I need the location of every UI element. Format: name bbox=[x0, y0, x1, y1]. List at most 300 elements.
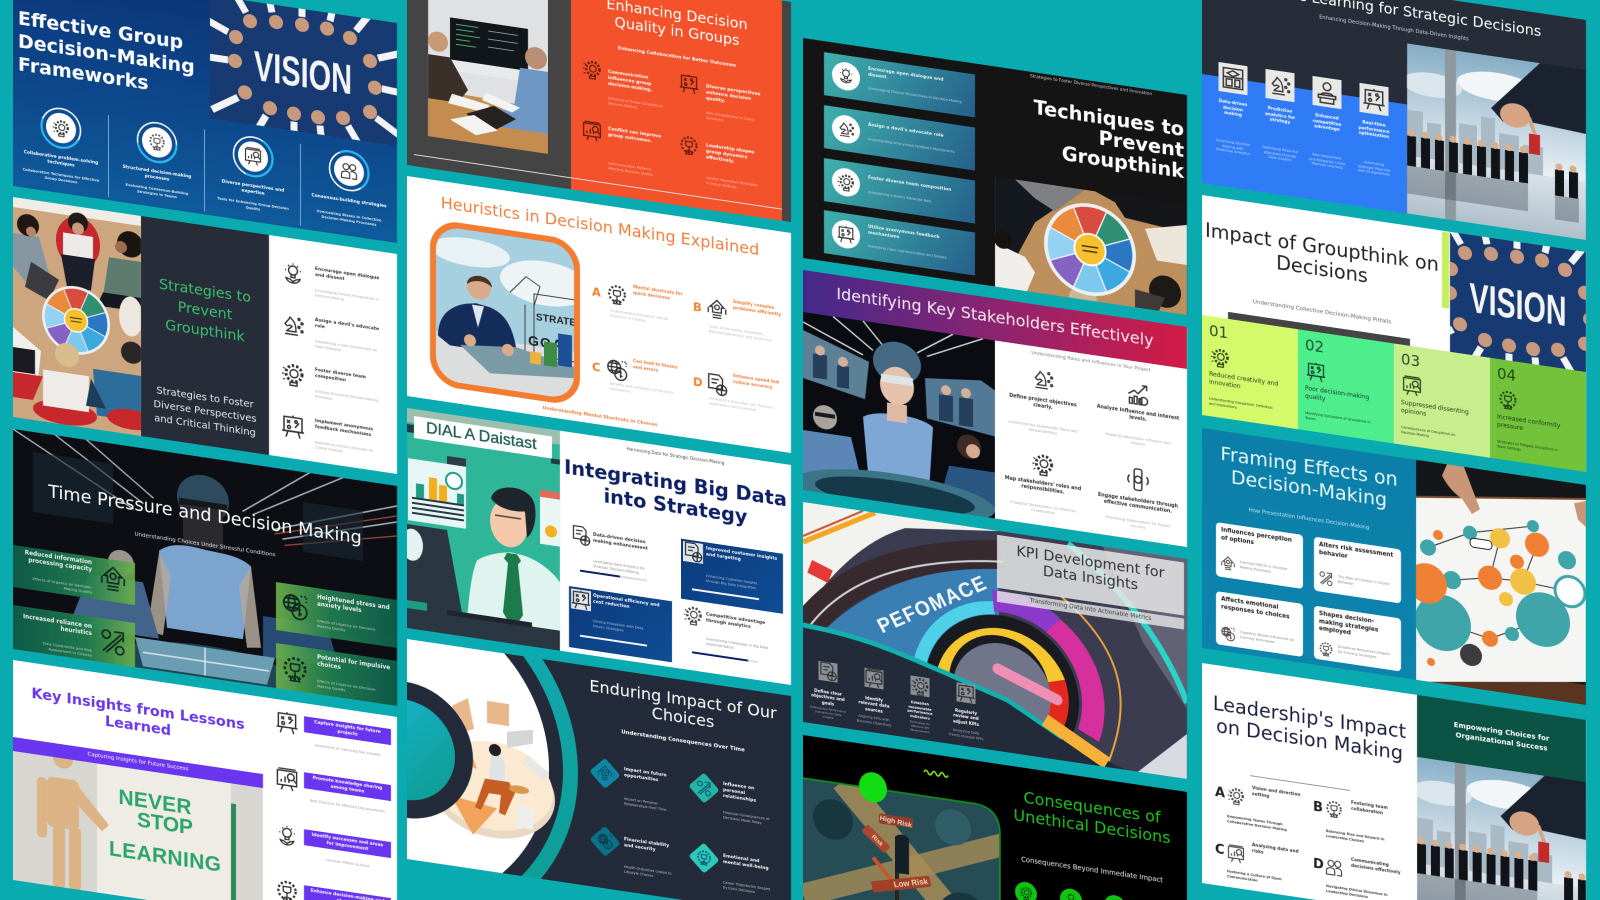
text: communicating decisions: Communicating bbox=[1351, 858, 1389, 868]
text: subtitle: Encouraging Diverse Perspectives in Decision-Making bbox=[868, 86, 962, 104]
text: balancing risk: Leadership Choices bbox=[1326, 833, 1364, 843]
heading: Decision-Making bbox=[1231, 466, 1387, 511]
text: define clear objectives: goals bbox=[822, 699, 834, 706]
photo: vision hands: VISION bbox=[254, 42, 352, 103]
icon: gear bbox=[832, 166, 860, 198]
letter D: D bbox=[1313, 856, 1324, 873]
icon: bulb bbox=[276, 823, 298, 850]
text: heading: employed bbox=[1319, 626, 1351, 637]
text: subtitle: Effects of Urgency on Decision- bbox=[33, 576, 92, 590]
text: financial consequences bbox=[723, 810, 783, 829]
text: heading: Reduced information bbox=[25, 550, 92, 566]
text: mental shortcuts: quick decisions bbox=[633, 291, 670, 301]
text: heading: behavior bbox=[1319, 549, 1348, 560]
text: heading bbox=[1209, 371, 1293, 398]
text: subtitle: Team Settings bbox=[1497, 444, 1521, 451]
text: consensus-building strategies: Consensus-building strategies bbox=[311, 193, 387, 210]
text: influence on relationships: Influence on bbox=[723, 782, 754, 792]
panel: heuristics in decision making explained bbox=[407, 176, 791, 453]
text: heading: Influences perception bbox=[1221, 527, 1292, 544]
title box bbox=[997, 535, 1184, 616]
heading: Data Insights bbox=[1043, 564, 1138, 594]
text: define clear objectives bbox=[806, 686, 850, 709]
card: increased reliance on heuristics bbox=[13, 605, 135, 667]
text: structured decision-making processes: processes bbox=[145, 174, 169, 182]
icon: arrow bbox=[101, 629, 125, 656]
text: career trajectories bbox=[723, 880, 783, 899]
text: impact on relationships: Relationships Over Time bbox=[624, 801, 667, 812]
text: communicating decisions bbox=[1351, 858, 1407, 877]
number: 04 bbox=[1497, 364, 1516, 385]
photo: businessman with goal sketch: GOAL bbox=[528, 332, 572, 355]
panel: identifying key stakeholders effectively bbox=[803, 270, 1187, 547]
text: subtitle: Assessment in Choices bbox=[48, 646, 92, 658]
panel: machine learning for strategic decisions bbox=[1202, 0, 1586, 240]
heading: Enduring Impact of Our bbox=[589, 676, 777, 723]
icon: study square bbox=[1218, 62, 1248, 95]
photo: businessman with goal sketch: STRATE bbox=[536, 312, 576, 329]
text: emotional wellbeing: mental well-being bbox=[723, 860, 769, 872]
text: heading: Heightened stress and bbox=[317, 595, 390, 611]
text: heading bbox=[1305, 385, 1389, 412]
text: benefits and limitations: Benefits and Limitations of Heuristic bbox=[610, 381, 674, 395]
card: shapes strategies bbox=[1314, 606, 1401, 672]
text: empowering teams: Collaborative Decision Making bbox=[1227, 819, 1287, 832]
text: encouraging diverse perspectives: Encouraging Diverse Perspectives in bbox=[315, 288, 379, 302]
text: fostering open communication: Fostering a Culture of Open bbox=[1227, 869, 1282, 881]
text: types of heuristics bbox=[709, 324, 779, 344]
subtitle: Strategies to Foster bbox=[156, 385, 254, 411]
label: identify successes: for improvement bbox=[327, 841, 368, 852]
photo: never stop learning mannequin bbox=[13, 751, 263, 900]
heading: Choices bbox=[652, 703, 714, 732]
text: optimizing resource bbox=[1255, 144, 1305, 165]
text: heuristics in everyday life: Heuristics in Everyday Life: Practical bbox=[709, 396, 773, 410]
progress bar bbox=[692, 588, 759, 600]
text: leadership shapes: Leadership shapes bbox=[706, 143, 755, 155]
text: conflict can improve: Conflict can improve bbox=[608, 126, 661, 139]
illustration: analyst at laptop bbox=[407, 408, 560, 650]
heading: Quality in Groups bbox=[614, 14, 740, 49]
text: analyzing data bbox=[1252, 843, 1308, 862]
text: balancing risk: Balancing Risk and Reward in bbox=[1326, 829, 1384, 841]
text: overcoming challenges: Implementation bbox=[706, 641, 734, 649]
text: data-driven decision making: making enhancement bbox=[593, 538, 648, 551]
text: enhance speed: Enhance speed but bbox=[733, 374, 779, 386]
text: heading: choices bbox=[317, 662, 341, 672]
text: subtitle bbox=[706, 573, 772, 592]
label: promote knowledge sharing bbox=[304, 772, 391, 801]
text: subtitle: Making Quality bbox=[317, 683, 345, 692]
text: analyze influence: Analyze influence and interest bbox=[1097, 404, 1179, 422]
icon: brain gear bbox=[582, 57, 602, 80]
panel: leadership's impact on decision making bbox=[1202, 663, 1586, 900]
text: collaborative techniques subtitle: Collaborative Techniques for Effective bbox=[23, 168, 99, 183]
text: fostering team: Fostering team bbox=[1351, 801, 1388, 811]
text: identify relevant data: sources bbox=[865, 706, 883, 714]
text: tools subtitle: Quality bbox=[246, 206, 260, 212]
text: real-time performance: performance bbox=[1359, 125, 1389, 135]
side panel dark bbox=[141, 216, 269, 455]
icon: square two bbox=[864, 668, 884, 689]
icon: board bbox=[832, 218, 860, 250]
icon: square one bbox=[818, 661, 838, 683]
subtitle: Transforming Data into Actionable Metrics bbox=[1030, 598, 1151, 622]
text: enhanced competitive: advantage bbox=[1314, 124, 1340, 133]
text: establishing safe environment: Open Dialogue bbox=[315, 344, 341, 352]
icon: square bbox=[571, 588, 591, 611]
label: capture insights: projects bbox=[337, 729, 358, 737]
text: banner title: DIAL A Daistast bbox=[426, 419, 537, 453]
heading bbox=[1202, 691, 1417, 767]
text: heading: Affects emotional bbox=[1221, 596, 1279, 611]
subtitle: Strategies to Foster Diverse Perspectives and Innovation bbox=[1030, 74, 1152, 97]
text: enhancing decision: Making with bbox=[1222, 144, 1244, 151]
text: subtitle bbox=[1401, 425, 1485, 447]
icon bbox=[1220, 555, 1236, 572]
label: identify successes: Identify successes and areas bbox=[312, 833, 383, 848]
photo: two men at computer bbox=[428, 0, 548, 153]
text: subtitle bbox=[1209, 396, 1293, 418]
text: conflict can improve: group outcomes. bbox=[608, 132, 652, 144]
panel: enhancing decision quality in groups bbox=[407, 0, 791, 221]
icon: trophy gear bbox=[284, 656, 307, 683]
panel: key insights from lessons learned bbox=[13, 660, 397, 900]
text: heading bbox=[1497, 413, 1581, 441]
text: heading: Alters risk assessment bbox=[1319, 542, 1393, 559]
text: financial stability: and security bbox=[624, 843, 655, 853]
icon: board bbox=[679, 72, 699, 95]
text: prioritizing stakeholders bbox=[1093, 513, 1183, 536]
text: subtitle: Establishing a Devil's Advocate Role bbox=[868, 190, 931, 204]
card: foster diverse team bbox=[824, 158, 975, 224]
text: heading: of options bbox=[1221, 535, 1254, 546]
icon: green circle one bbox=[1015, 880, 1037, 900]
text: fostering open communication: Communication bbox=[1227, 874, 1258, 882]
text: subtitle: Effects of Urgency on Decision- bbox=[317, 618, 376, 632]
text: subtitle: The Role of Context in Choice Behavior bbox=[1338, 574, 1390, 586]
text: subtitle: Strategies to Mitigate Groupthink in bbox=[1497, 439, 1558, 452]
card: heightened stress and anxiety bbox=[276, 582, 397, 648]
text: mapping stakeholder influence bbox=[1093, 430, 1183, 453]
text: heuristics in everyday life: Applications and Examples bbox=[709, 401, 756, 412]
subtitle: Understanding Collective Decision-Making Pitfalls bbox=[1253, 299, 1391, 326]
text: understanding stakeholder roles: Responsibilities bbox=[1029, 427, 1057, 436]
heading: KPI Development for bbox=[1016, 544, 1165, 582]
text: identify relevant data bbox=[852, 693, 896, 716]
text: biases and errors bbox=[633, 359, 683, 378]
text: appointing devil's advocate: Appointing a Devil's Advocate for bbox=[315, 440, 373, 453]
text: role of leadership: Dynamics bbox=[706, 115, 723, 121]
icon: board bbox=[282, 415, 304, 439]
text: heading: Suppressed dissenting bbox=[1401, 399, 1469, 416]
label: capture insights bbox=[304, 716, 391, 745]
text: influence on relationships bbox=[723, 782, 767, 806]
text: real-time performance bbox=[1349, 118, 1399, 143]
photo: never stop learning mannequin: STOP bbox=[137, 808, 193, 840]
icon: trophy gear bbox=[606, 283, 628, 307]
footer text: Understanding Mental Shortcuts in Choices bbox=[543, 406, 657, 428]
card: potential for impulsive choices bbox=[276, 643, 397, 706]
text: data-driven decision making bbox=[1208, 98, 1258, 122]
text: encourage open dialogue: Encourage open dialogue bbox=[315, 267, 379, 282]
text: simplify complex bbox=[733, 300, 787, 319]
text: vision and direction bbox=[1252, 786, 1308, 805]
text: subtitle bbox=[1305, 411, 1389, 432]
text: navigating ethical dilemmas: Leadership Decisions bbox=[1326, 888, 1368, 899]
text: heading: Increased reliance on bbox=[23, 614, 92, 630]
text: enhancing decision: Enhancing Decision bbox=[1216, 138, 1250, 147]
icon: knight bbox=[1032, 366, 1054, 393]
illustration: concentric circles with isometric scene bbox=[407, 639, 597, 887]
text: heading: Increased conformity bbox=[1497, 413, 1560, 430]
photo: circle meeting with wheel bbox=[13, 197, 142, 436]
icon: watch bbox=[1126, 467, 1150, 493]
photo: hands drawing mind map bbox=[1416, 460, 1586, 705]
text: communication influences: Communication bbox=[608, 69, 648, 80]
text: mapping stakeholder influence: Interest bbox=[1131, 441, 1145, 447]
text: establishing safe environment: Establishing a Safe Environment for bbox=[315, 339, 378, 352]
card: 01 reduced creativity bbox=[1202, 315, 1298, 429]
text: diverse perspectives: quality. bbox=[706, 96, 725, 104]
subtitle: and Critical Thinking bbox=[154, 413, 256, 439]
text: benefits and limitations bbox=[610, 381, 678, 401]
text: enhancing decision: Predictive Analytics bbox=[1216, 147, 1250, 157]
text: communication patterns: Communication Patterns bbox=[608, 161, 651, 171]
text: fostering open communication bbox=[1227, 869, 1295, 889]
letter D: D bbox=[693, 374, 703, 390]
text: enhanced competitive bbox=[1302, 111, 1352, 136]
text: conflict resolution: in Group Settings bbox=[706, 180, 736, 188]
photo: woman with headset at table bbox=[13, 429, 398, 688]
text: implement anonymous feedback: feedback mechanisms bbox=[315, 425, 371, 438]
progress bar bbox=[580, 569, 647, 581]
photo: crossroads with risk signs: Risk bbox=[870, 834, 884, 848]
text: engaging stakeholders bbox=[998, 498, 1088, 521]
heading bbox=[571, 0, 783, 56]
text: diverse perspectives and expertise: expertise bbox=[241, 188, 265, 196]
text: leveraging analytics: Leveraging Data Analytics for bbox=[593, 558, 645, 570]
photo: wheel meeting from above bbox=[995, 176, 1187, 315]
photo: crossroads with risk signs: High Risk bbox=[880, 815, 912, 830]
panel: strategies to prevent groupthink bbox=[13, 197, 397, 474]
text: analyze influence: levels. bbox=[1129, 415, 1147, 423]
text: importance of capturing: Importance of Capturing Key Insights bbox=[315, 743, 380, 757]
text: risk assessment: Risk Assessment bbox=[1312, 152, 1342, 161]
banner: dial a daistast bbox=[414, 416, 552, 458]
text: enhanced competitive: competitive bbox=[1313, 119, 1341, 128]
text: types of heuristics: Representativeness, and Anchoring bbox=[709, 329, 771, 342]
icon: growth bbox=[1126, 382, 1150, 408]
heading: Integrating Big Data bbox=[564, 455, 787, 511]
text: health outcomes: Health Outcomes Linked to bbox=[624, 864, 672, 876]
text: heading bbox=[1221, 596, 1301, 623]
icon: consensus building bbox=[328, 150, 370, 192]
heading: Impact of Groupthink on bbox=[1205, 218, 1439, 276]
text: influence of cohesion: Decision-Making bbox=[608, 100, 637, 109]
icon: diamond four bbox=[686, 837, 722, 879]
text: impact on relationships: Impact on Personal bbox=[624, 796, 658, 805]
icon bbox=[1498, 389, 1518, 412]
text: impact on future: Impact on future bbox=[624, 767, 667, 779]
icon: gear head bbox=[1227, 786, 1245, 806]
panel: integrating big data into strategy bbox=[407, 408, 791, 684]
text: heading: heuristics bbox=[60, 627, 92, 638]
text: enhance speed bbox=[733, 374, 785, 393]
letter A: A bbox=[1215, 785, 1225, 801]
text: heading: Assign a devil's advocate role bbox=[868, 123, 944, 139]
text: understanding stakeholder roles: Understanding Stakeholder Roles and bbox=[1008, 419, 1078, 434]
letter B: B bbox=[1313, 799, 1323, 816]
text: heading: processing capacity bbox=[28, 558, 92, 574]
text: collaborative problem-solving techniques: Collaborative problem-solving bbox=[24, 150, 98, 166]
text: heading bbox=[24, 550, 92, 574]
text: subtitle: and Implications bbox=[1209, 401, 1237, 409]
text: diverse perspectives: Diverse perspectives bbox=[706, 84, 760, 97]
icon: document bbox=[706, 372, 728, 398]
text: automating strategic planning: Automating bbox=[1364, 160, 1384, 167]
text: heading: Improved customer insights bbox=[706, 546, 777, 562]
heading: Consequences of bbox=[1023, 788, 1161, 827]
icon: globe bbox=[606, 358, 628, 383]
label: identify successes bbox=[304, 829, 391, 858]
text: regularly review bbox=[944, 706, 988, 728]
text: subtitle: Driving Innovation with Data- bbox=[593, 618, 645, 630]
icon: chart bbox=[582, 119, 602, 142]
subtitle: Understanding Choices Under Stressful Conditions bbox=[134, 532, 275, 558]
text: leadership shapes bbox=[706, 143, 762, 169]
photo: chess pieces and hand bbox=[1407, 43, 1586, 240]
heading: Unethical Decisions bbox=[1013, 805, 1171, 848]
text: automating strategic planning: Strategic Planning bbox=[1358, 164, 1390, 173]
heading: Key Insights from Lessons bbox=[31, 686, 245, 733]
text: aligning kpis bbox=[852, 713, 896, 729]
text: biases and errors: Can lead to biases bbox=[633, 359, 677, 371]
text: influence of cohesion bbox=[608, 96, 674, 115]
letter C: C bbox=[592, 359, 600, 375]
text: data-driven decision making: decision bbox=[1223, 105, 1243, 113]
text: heading bbox=[868, 225, 958, 250]
subtitle: Diverse Perspectives bbox=[153, 399, 257, 425]
subtitle: Empowering Choices for bbox=[1454, 721, 1549, 743]
icon: gear bbox=[683, 603, 703, 626]
number: 02 bbox=[1305, 336, 1324, 357]
text: encouraging diverse perspectives: Decision-Making bbox=[315, 293, 344, 301]
text: heuristics in everyday life bbox=[709, 396, 779, 416]
text: automating strategic planning: with AI Algorithms bbox=[1358, 169, 1390, 177]
text: understanding stakeholder roles bbox=[998, 418, 1088, 441]
heading bbox=[13, 683, 263, 754]
icon: structured processes bbox=[136, 122, 178, 164]
icon: diamond two bbox=[686, 767, 722, 809]
subtitle: Harnessing Data for Strategic Decision-Making bbox=[627, 445, 724, 465]
text: impact on future bbox=[624, 767, 676, 787]
text: risk assessment: and Mitigation Using bbox=[1309, 157, 1345, 166]
icon: bulb bbox=[832, 60, 860, 92]
text: analyzing data: Analyzing data and bbox=[1252, 843, 1299, 855]
text: analyze influence bbox=[1093, 404, 1183, 430]
subtitle: Enhancing Collaboration for Better Outcomes bbox=[618, 46, 736, 68]
text: risk assessment: Machine Learning bbox=[1312, 162, 1342, 170]
text: appointing devil's advocate: Critical Analysis bbox=[315, 445, 343, 453]
text: real-time performance: Real-time bbox=[1362, 120, 1386, 129]
text: banner subtitle: Capturing Insights for Future Success bbox=[88, 752, 188, 773]
heading bbox=[560, 454, 791, 534]
text: establish measurable: indicators bbox=[910, 713, 930, 720]
text: communicating decisions: decisions effectively bbox=[1351, 863, 1400, 875]
heading bbox=[997, 541, 1184, 601]
decoration: squiggle bbox=[923, 767, 951, 779]
text: leadership shapes: group dynamics bbox=[706, 149, 747, 160]
text: role of leadership: Role of Leadership in Group bbox=[706, 110, 754, 121]
heading: Strategies to bbox=[159, 277, 251, 306]
text: heading: and targeting bbox=[706, 552, 741, 562]
photo: vision hands bbox=[1450, 232, 1586, 372]
icon: knight bbox=[284, 316, 304, 336]
text: financial stability: Financial stability bbox=[624, 837, 669, 849]
text: communication influences: influences group bbox=[608, 75, 651, 87]
card: 02 poor decision bbox=[1298, 329, 1394, 443]
text: empowering teams: Empowering Teams Through bbox=[1227, 814, 1283, 826]
text: structured decision-making processes: Structured decision-making bbox=[123, 165, 191, 180]
text: data-driven decision making: Data-driven bbox=[1219, 99, 1247, 108]
text: analyzing data trends: Analyzing Data bbox=[953, 727, 979, 735]
text: vision and direction: setting bbox=[1252, 791, 1269, 799]
text: fostering team: collaboration bbox=[1351, 806, 1383, 816]
text: heading bbox=[1319, 542, 1399, 569]
text: emotional wellbeing: Emotional and bbox=[723, 854, 759, 864]
text: engaging stakeholders: Engaging Stakeholders for Effective bbox=[1010, 500, 1076, 514]
icon: money house bbox=[100, 566, 126, 592]
text: health outcomes bbox=[624, 864, 684, 883]
text: defining kpis: Insights bbox=[823, 714, 833, 719]
text: common pitfalls: Common Pitfalls to Avoid bbox=[326, 858, 369, 869]
icon: diverse perspectives bbox=[232, 136, 274, 178]
text: impact on future: opportunities bbox=[624, 773, 658, 783]
label: promote knowledge sharing: among teams bbox=[331, 784, 364, 794]
icon: knight square bbox=[1266, 69, 1294, 102]
text: health outcomes: Lifestyle Choices bbox=[624, 869, 654, 878]
icon: knight bbox=[832, 113, 860, 145]
letter C: C bbox=[1215, 842, 1225, 858]
text: subtitle bbox=[593, 618, 659, 638]
icon: gear bbox=[1032, 451, 1054, 478]
text: foster diverse team: composition bbox=[315, 374, 346, 383]
text: establish measurable: performance bbox=[907, 708, 933, 716]
illustration: performance gauge: PEFOMACE bbox=[874, 572, 990, 638]
text: best practices: Best Practices for Effective Documentation bbox=[310, 799, 385, 814]
card: utilize anonymous feedback bbox=[824, 210, 975, 276]
text: optimizing resource: Data Insights bbox=[1268, 155, 1292, 163]
icon: square bbox=[683, 540, 703, 563]
text: defining kpis: Defining Key Performance bbox=[810, 704, 846, 714]
photo: woman with visor and holographic panels bbox=[803, 312, 995, 518]
text: subtitle: Consequences of Groupthink on bbox=[1401, 425, 1455, 437]
label: enhance decision making bbox=[304, 885, 391, 900]
text: data-driven decision making bbox=[593, 532, 657, 553]
text: heading: Reduced creativity and bbox=[1209, 371, 1278, 388]
text: utilizing structured processes: Utilizing Structured Decision-Making bbox=[315, 389, 379, 403]
subtitle: Understanding Consequences Over Time bbox=[621, 729, 745, 754]
text: role of leadership bbox=[706, 110, 768, 129]
text: understanding heuristics bbox=[610, 308, 676, 328]
heading: Identifying Key Stakeholders Effectively bbox=[836, 284, 1154, 350]
text: competitive advantage: through analytics bbox=[706, 618, 751, 629]
subtitle: Consequences Beyond Immediate Impact bbox=[1021, 855, 1163, 884]
text: define clear objectives: objectives and bbox=[811, 693, 845, 703]
text: heading bbox=[1319, 611, 1399, 646]
text: heading: innovation bbox=[1209, 378, 1241, 390]
